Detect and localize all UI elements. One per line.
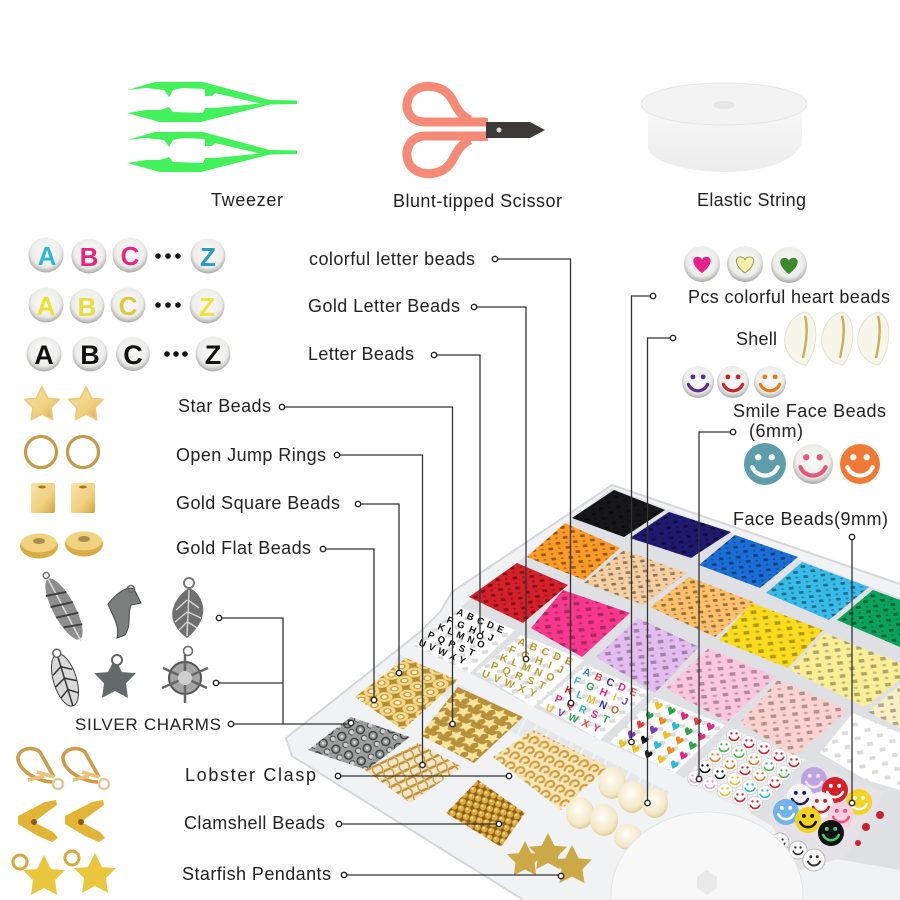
connector: silver charms <box>213 615 354 727</box>
connector: letter beads <box>431 352 483 639</box>
icons: gold letter beads: Z <box>199 292 215 322</box>
icons: gold flat beads <box>20 532 103 558</box>
label: gold square beads: Gold Square Beads <box>176 493 340 513</box>
cell: gold letter beads: FGHIJ <box>507 644 565 677</box>
icons: colourful letter beads: C <box>121 241 140 271</box>
tool: tweezers <box>127 82 297 172</box>
cell: black letter beads <box>412 607 515 673</box>
charm: leaf <box>172 578 203 638</box>
cell: colorful letter beads <box>539 665 650 740</box>
icons: colourful letter beads: A <box>38 241 57 271</box>
cell: silver charms <box>308 717 410 770</box>
connector: open jump rings <box>334 452 425 768</box>
cell: light blue <box>766 562 869 620</box>
charm: ship wheel <box>162 646 208 703</box>
icons: silver charms <box>35 568 208 709</box>
cell: black letter beads: ABCDE <box>455 607 505 636</box>
cell: black letter beads: UVWXY <box>417 638 468 668</box>
label: heart beads: Pcs colorful heart beads <box>688 287 890 307</box>
connector: shell <box>645 335 676 806</box>
cell: colorful letter beads: FGHIJ <box>572 675 630 708</box>
connector: starfish pendants <box>341 872 564 879</box>
cell: yellow <box>719 603 823 668</box>
icons: lobster clasps <box>18 749 109 789</box>
cell: light pink <box>665 648 776 722</box>
cell: jump rings <box>365 743 462 803</box>
icons: black letter beads: A <box>34 340 54 370</box>
label: gold flat beads: Gold Flat Beads <box>176 538 311 558</box>
cell: black letter beads: PQRST <box>426 630 476 659</box>
icons: colourful letter beads: B <box>80 242 98 272</box>
cell: navy <box>630 512 731 558</box>
cell: heart beads: ♥♥♥♥♥ <box>633 718 699 755</box>
cell: heart beads: ♥♥♥♥♥ <box>615 737 681 774</box>
cell: cream yellow <box>790 633 900 707</box>
cell: gold flat beads <box>355 658 458 730</box>
connector: colorful letter beads <box>492 256 574 706</box>
icons: shells <box>785 312 889 365</box>
cell: light orange <box>650 577 754 637</box>
label: clamshell beads: Clamshell Beads <box>184 813 325 833</box>
label: letter beads: Letter Beads <box>308 344 414 364</box>
cell: clamshell beads <box>446 780 525 847</box>
cell: gold letter beads <box>476 635 584 707</box>
label: lobster clasp: Lobster Clasp <box>185 765 316 785</box>
label: starfish pendants: Starfish Pendants <box>182 864 331 884</box>
cell: heart beads: ♥♥♥♥♥ <box>642 709 708 746</box>
tray white strip <box>395 662 665 800</box>
cell: heart beads: ♥♥♥♥♥ <box>651 699 717 736</box>
tray rim <box>286 485 900 899</box>
icons: heart beads <box>684 246 807 283</box>
connector: smile face beads <box>696 429 736 782</box>
tool: elastic string spool <box>641 83 807 172</box>
cell: pale cream <box>868 685 900 728</box>
icons: gold starfish pendants <box>13 851 116 895</box>
label: open jump rings: Open Jump Rings <box>176 445 326 465</box>
cell: elastic spool <box>611 812 803 900</box>
charm: starfish <box>94 655 136 698</box>
label: star beads: Star Beads <box>178 396 271 416</box>
icons: colourful letter beads <box>28 238 226 274</box>
icons: gold letter beads <box>28 288 224 324</box>
cell: pink <box>531 590 630 657</box>
charm: dolphin <box>108 586 141 638</box>
icons: black letter beads: Z <box>205 340 221 370</box>
cell: heart beads: ♥♥♥♥♥ <box>624 728 690 765</box>
cell: colorful letter beads: UVWXY <box>544 702 602 735</box>
label: 6mm: (6mm) <box>749 421 803 441</box>
cell: big smile beads <box>766 763 885 871</box>
connector: heart beads <box>629 293 656 745</box>
icons: small smile beads <box>682 366 786 398</box>
cell: green <box>837 590 900 647</box>
cell: gold letter beads: KLMNO <box>498 652 556 685</box>
label: shell: Shell <box>736 329 777 349</box>
icons: large smile beads <box>744 443 880 485</box>
cell: colorful letter beads: KLMNO <box>563 684 621 717</box>
cell: lilac <box>596 618 699 693</box>
tray body <box>286 485 900 900</box>
connector: star beads <box>279 404 455 727</box>
label: elastic string: Elastic String <box>697 190 806 210</box>
cell: red <box>469 563 568 623</box>
icons: gold square beads <box>31 483 95 513</box>
tool: scissors <box>407 86 545 174</box>
label: smile face beads: Smile Face Beads <box>733 401 886 421</box>
icons: gold letter beads: C <box>119 291 138 321</box>
cell: black letter beads: KLMNO <box>436 622 486 651</box>
cell: white <box>820 713 900 790</box>
icons: gold letter beads: A <box>37 291 56 321</box>
icons: black letter beads: B <box>80 340 100 370</box>
cell: black <box>572 490 665 537</box>
label: scissor: Blunt-tipped Scissor <box>393 191 562 211</box>
cell: black letter beads: FGHIJ <box>445 615 495 644</box>
icons: gold star beads <box>25 387 103 420</box>
connector: gold square beads <box>355 501 402 676</box>
connector: gold flat beads <box>320 546 377 703</box>
cell: lobster clasps <box>493 730 608 810</box>
label: silver charms: SILVER CHARMS <box>75 715 221 734</box>
icons: clamshell beads <box>18 800 105 842</box>
label: gold letter beads: Gold Letter Beads <box>308 296 460 316</box>
charm: feather <box>35 568 91 646</box>
label: face beads 9mm: Face Beads(9mm) <box>733 509 888 529</box>
cell: blue <box>699 535 798 588</box>
bead organizer tray <box>286 485 900 900</box>
cell: starfish pendants <box>507 833 592 883</box>
cell: gold letter beads: ABCDE <box>516 636 574 669</box>
tray partitions <box>412 488 900 870</box>
cell: tan <box>584 550 687 605</box>
label: colorful letter beads: colorful letter beads <box>309 249 475 269</box>
icons: black letter beads <box>26 336 230 372</box>
charm: slim leaf <box>45 646 84 709</box>
cell: cowrie shells <box>566 767 668 850</box>
cell: colorful letter beads: ABCDE <box>581 666 639 699</box>
icons: black letter beads: C <box>123 340 143 370</box>
cell: heart beads <box>610 697 725 774</box>
connector: gold letter beads <box>471 304 529 662</box>
cell: small smile beads <box>683 728 806 813</box>
cell: colorful letter beads: PQRST <box>553 693 611 727</box>
label: tweezer: Tweezer <box>211 190 283 210</box>
connector: face beads 9mm <box>849 534 855 806</box>
connector: clamshell beads <box>336 821 502 827</box>
connector: lobster clasp <box>335 773 512 779</box>
cell: gold letter beads: UVWXY <box>480 668 538 701</box>
cell: gold letter beads: PQRST <box>489 660 548 693</box>
cell: salmon <box>740 680 849 757</box>
icons: gold letter beads: B <box>78 292 96 322</box>
cell: star beads <box>420 687 523 763</box>
icons: colourful letter beads: Z <box>200 242 216 272</box>
cell: orange <box>527 523 620 580</box>
icons: open jump rings <box>26 436 98 468</box>
